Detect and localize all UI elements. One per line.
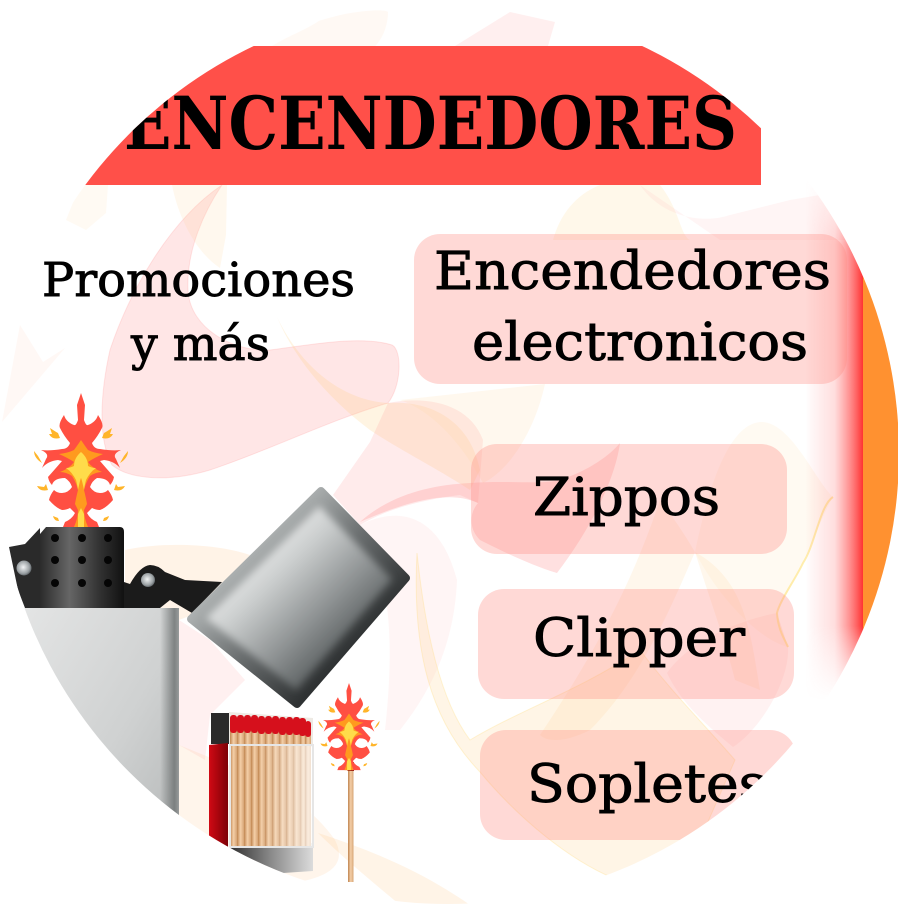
smoke: thin yellow wisp bbox=[777, 497, 833, 647]
matchbox back bbox=[211, 713, 229, 744]
smoke: pale loop right bbox=[695, 422, 833, 647]
icon: lit match bbox=[318, 683, 380, 882]
lighter body bbox=[24, 608, 179, 815]
button: zippos bbox=[471, 444, 787, 554]
lighter cam bbox=[9, 528, 40, 608]
smoke: pale wisps top bbox=[272, 10, 388, 46]
smoke: glow beside match bbox=[318, 833, 470, 905]
promotions text: y más bbox=[130, 317, 270, 372]
button: sopletes: Sopletes bbox=[527, 755, 767, 815]
smoke: pink wisps top bbox=[455, 12, 555, 46]
title banner bbox=[85, 46, 761, 185]
button: encendedores electronicos: electronicos bbox=[472, 313, 808, 373]
smoke: main pink swoosh bbox=[102, 185, 399, 478]
match flame bbox=[318, 683, 380, 770]
smoke: butterfly bbox=[360, 443, 620, 573]
smoke: pink behind lighter body bbox=[179, 620, 245, 760]
button: encendedores electronicos bbox=[414, 234, 847, 384]
match head bbox=[348, 762, 354, 771]
smoke: upper pink lobe bbox=[641, 186, 836, 236]
button: zippos: Zippos bbox=[533, 468, 720, 528]
button: clipper bbox=[478, 589, 794, 699]
smoke: yellow band bbox=[277, 317, 480, 490]
smoke: orange behind matchbox bbox=[179, 745, 339, 885]
smoke: pale cream under first button bbox=[400, 384, 545, 483]
button: clipper: Clipper bbox=[533, 609, 745, 669]
title: ENCENDEDORES bbox=[124, 81, 737, 167]
smoke: pink lower right bbox=[667, 613, 788, 747]
smoke: wisp under banner bbox=[172, 185, 227, 268]
smoke: yellow cross bbox=[540, 500, 760, 740]
lighter flame bbox=[34, 393, 128, 527]
button: encendedores electronicos: Encendedores bbox=[434, 242, 831, 302]
icon: zippo lighter bbox=[9, 393, 410, 815]
matches bbox=[230, 715, 311, 846]
lighter insert bbox=[40, 527, 124, 608]
smoke: left triangle bbox=[2, 325, 65, 422]
lighter lid bbox=[191, 491, 406, 704]
match stick bbox=[348, 768, 354, 882]
promotions text bbox=[42, 253, 355, 372]
matchbox base bbox=[229, 843, 313, 874]
promotions text: Promociones bbox=[42, 253, 355, 308]
smoke: pale pink lower column bbox=[360, 516, 457, 730]
matchbox sleeve bbox=[230, 745, 313, 847]
smoke: pink lower band bbox=[333, 400, 483, 525]
hinge screw bbox=[141, 573, 155, 587]
icon: matchbox bbox=[209, 712, 313, 874]
smoke: upper yellow lobes bbox=[553, 185, 690, 240]
red and orange edge band bbox=[812, 202, 898, 683]
matchbox tray back bbox=[229, 712, 313, 747]
smoke: left pale wedge bbox=[66, 185, 108, 230]
lighter hinge arm bbox=[124, 565, 222, 613]
smoke: arc behind lighter bbox=[125, 545, 250, 620]
smoke: yellow fan at bottom bbox=[416, 553, 735, 878]
button: sopletes bbox=[480, 730, 796, 840]
matchbox red side bbox=[209, 743, 228, 852]
